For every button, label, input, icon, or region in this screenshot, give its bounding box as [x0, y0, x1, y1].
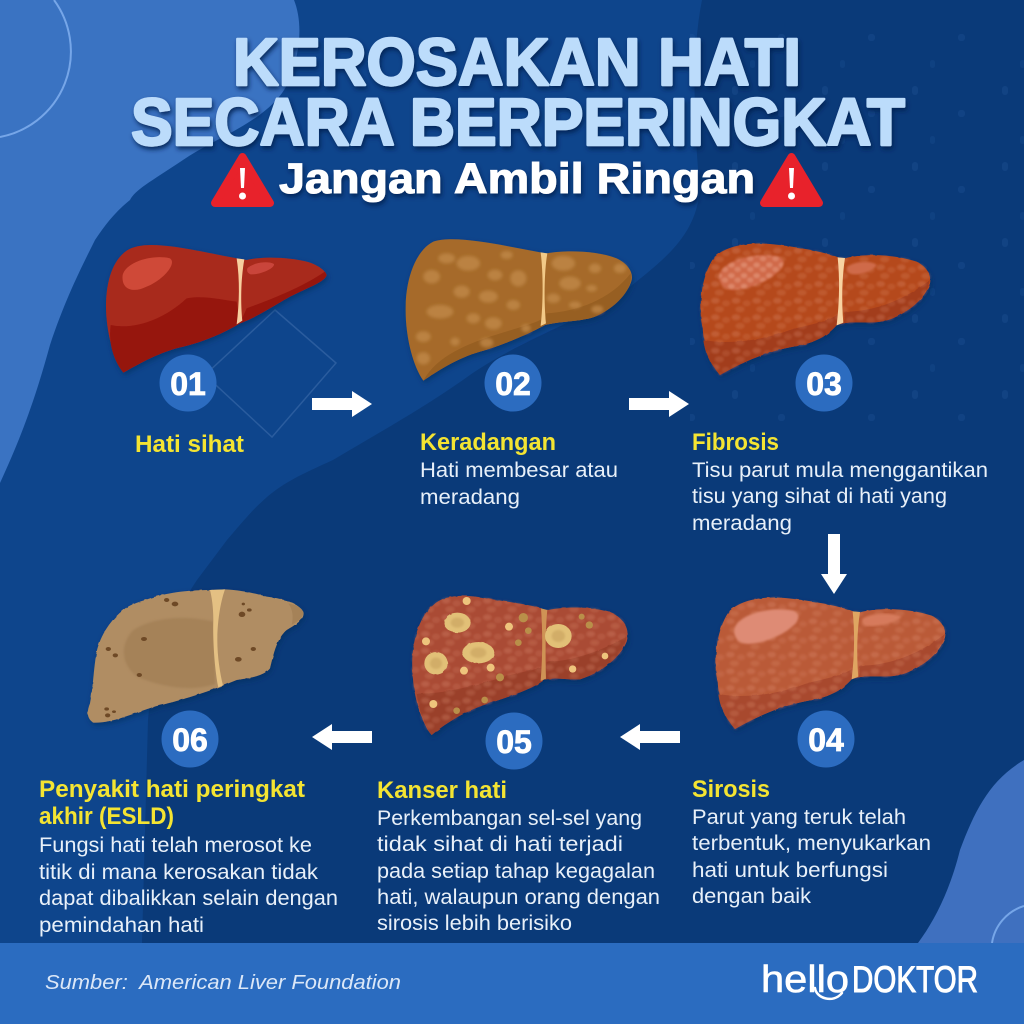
logo: helloDOKTOR: hello — [761, 959, 849, 1001]
source citation: Sumber: American Liver Foundation — [45, 972, 401, 994]
footer bar — [0, 943, 1024, 1024]
text: step 04: Parut yang teruk telah — [692, 805, 906, 829]
text: step 06: Fungsi hati telah merosot ke — [39, 833, 312, 857]
badge 06 — [162, 710, 218, 768]
text: step 02 — [420, 429, 618, 509]
text: step 04 — [692, 776, 931, 908]
title: SECARA BERPERINGKAT — [131, 85, 905, 160]
text: step 03: Tisu parut mula menggantikan — [692, 458, 988, 482]
text: step 04: dengan baik — [692, 884, 811, 908]
text: step 06: Penyakit hati peringkat — [39, 776, 305, 803]
text: step 06: titik di mana kerosakan tidak — [39, 860, 318, 884]
text: step 02: Hati membesar atau — [420, 458, 618, 482]
title: KEROSAKAN HATI — [233, 25, 801, 100]
badge 02 — [484, 354, 542, 412]
liver 06: end stage — [88, 589, 304, 723]
arrow 1 to 2 — [312, 391, 372, 417]
text: step 05 — [377, 777, 660, 935]
text: step 04: Sirosis — [692, 776, 770, 803]
diamond outline decoration — [205, 310, 336, 437]
badge 02: 02 — [495, 366, 531, 402]
text: step 06: akhir (ESLD) — [39, 803, 174, 830]
liver 02: inflammation — [406, 239, 632, 381]
arrow 2 to 3 — [629, 391, 689, 417]
liver 01: healthy — [106, 245, 327, 373]
text: step 03: Fibrosis — [692, 429, 779, 456]
text: step 02: Keradangan — [420, 429, 556, 456]
text: step 05: Perkembangan sel-sel yang — [377, 806, 642, 830]
logo: helloDOKTOR: DOKTOR — [852, 959, 978, 1000]
text: step 06 — [39, 776, 338, 937]
text: step 04: terbentuk, menyukarkan — [692, 831, 931, 855]
text: step 03: meradang — [692, 511, 792, 535]
text: step 04: hati untuk berfungsi — [692, 858, 888, 882]
badge 03 — [796, 354, 852, 412]
text: step 05: hati, walaupun orang dengan — [377, 885, 660, 909]
text: step 05: sirosis lebih berisiko — [377, 911, 572, 935]
text: step 06: dapat dibalikkan selain dengan — [39, 886, 338, 910]
arrow 3 to 4 — [821, 534, 847, 594]
liver 03: fibrosis — [701, 243, 930, 375]
liver 04: cirrhosis — [716, 597, 945, 729]
liver 05: cancer — [412, 596, 628, 735]
text: step 01: Hati sihat — [135, 431, 244, 458]
text: step 05: pada setiap tahap kegagalan — [377, 859, 655, 883]
badge 06: 06 — [172, 722, 208, 758]
title — [131, 25, 905, 160]
text: step 03 — [692, 429, 988, 535]
badge 01 — [160, 354, 216, 412]
badge 04 — [798, 710, 854, 768]
badge 01: 01 — [170, 366, 206, 402]
logo: helloDOKTOR — [761, 959, 978, 1001]
icon: warning left — [215, 157, 270, 203]
arrow 4 to 5 — [620, 724, 680, 750]
text: step 03: tisu yang sihat di hati yang — [692, 484, 947, 508]
subtitle: Jangan Ambil Ringan — [279, 155, 755, 203]
badge 05: 05 — [496, 724, 532, 760]
badge 04: 04 — [808, 722, 844, 758]
arrow 5 to 6 — [312, 724, 372, 750]
text: step 05: tidak sihat di hati terjadi — [377, 832, 623, 856]
text: step 06: pemindahan hati — [39, 913, 204, 937]
badge 03: 03 — [806, 366, 842, 402]
text: step 05: Kanser hati — [377, 777, 507, 804]
badge 05 — [486, 712, 542, 770]
text: step 02: meradang — [420, 485, 520, 509]
icon: warning right — [764, 157, 819, 203]
